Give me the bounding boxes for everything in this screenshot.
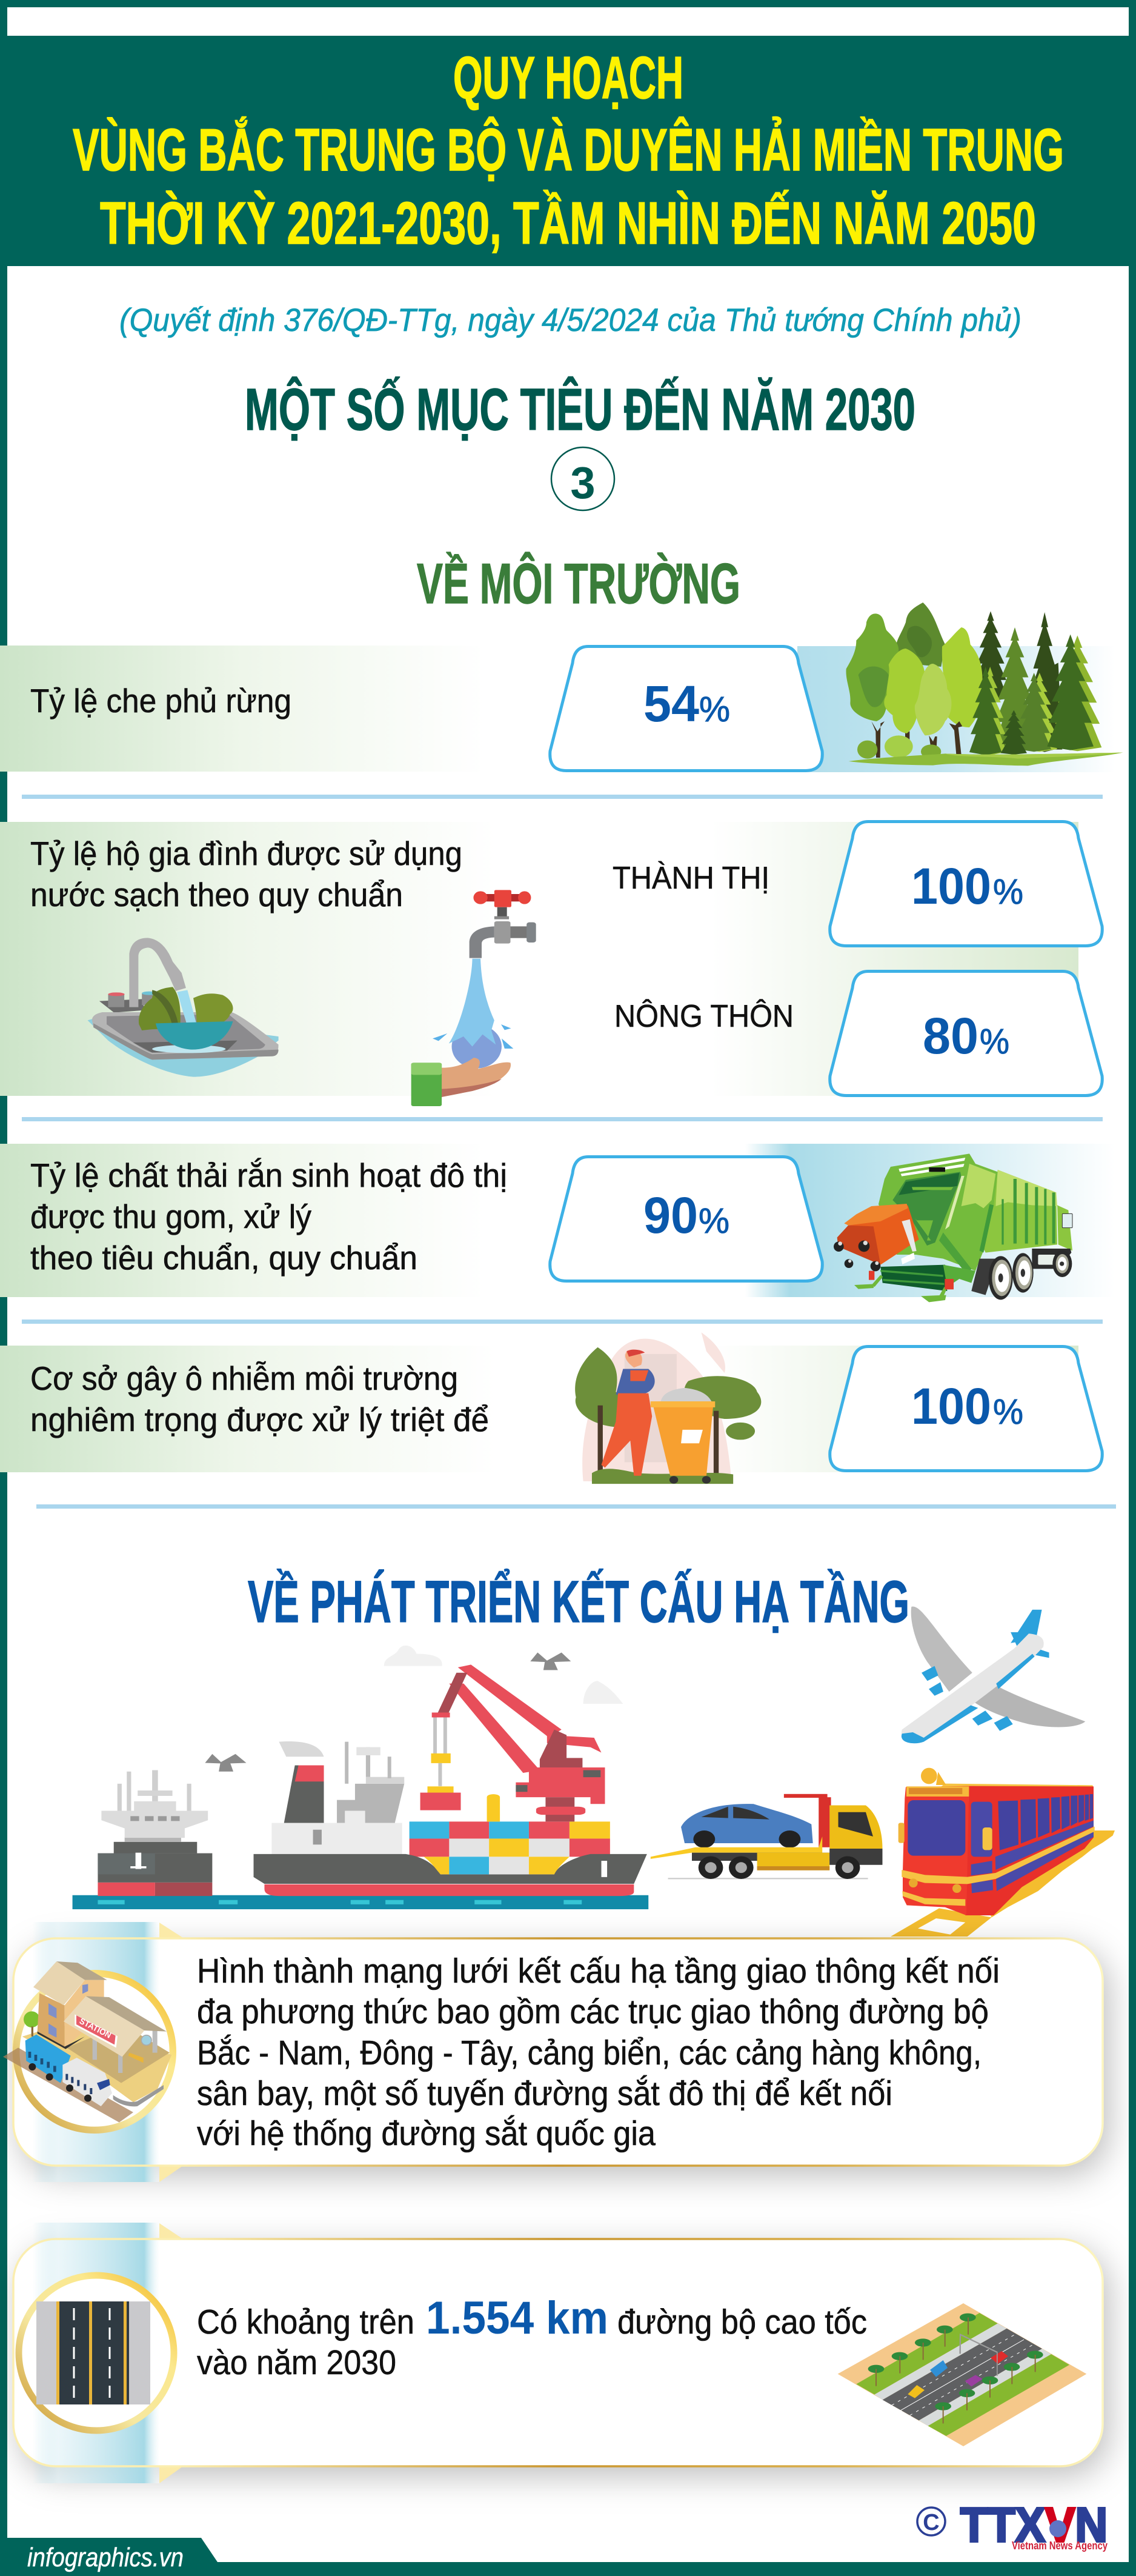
icon: railway station — [3, 1961, 173, 2130]
number badge — [551, 447, 614, 510]
card background — [13, 1938, 1103, 2166]
text: expressway length: vào năm 2030 — [197, 2343, 396, 2382]
logo: TTXVN: TTXVN — [960, 2498, 1108, 2552]
label: urban: THÀNH THỊ — [613, 861, 769, 896]
text: transport network: với hệ thống đường sắt quốc gia — [197, 2114, 656, 2153]
value box: 100%: % — [993, 1392, 1023, 1432]
footer bar — [0, 2538, 1136, 2576]
icon: water stream — [433, 959, 513, 1069]
value box: 80%: 80 — [923, 1007, 978, 1064]
label: rural: NÔNG THÔN — [614, 999, 794, 1034]
heading: environment: VỀ MÔI TRƯỜNG — [417, 552, 740, 615]
value box: 100% — [830, 822, 1102, 946]
illustration: tow truck with car — [651, 1794, 882, 1879]
text: transport network — [197, 1952, 1000, 2153]
value box: 54%: % — [699, 690, 730, 729]
label: pollution: Cơ sở gây ô nhiễm môi trường — [30, 1360, 458, 1397]
label: forest cover: Tỷ lệ che phủ rừng — [30, 682, 291, 719]
title: QUY HOẠCH — [453, 44, 683, 111]
panel: transport network — [3, 1922, 1103, 2182]
icon: hand — [411, 1058, 511, 1106]
card blue band — [33, 2223, 159, 2483]
panel: expressway — [13, 2223, 1103, 2483]
icon: sink with vegetables — [88, 938, 279, 1077]
label: clean water: nước sạch theo quy chuẩn — [30, 876, 403, 913]
icon: water tap — [470, 890, 536, 958]
label: solid waste: Tỷ lệ chất thải rắn sinh hoạt đô thị — [30, 1156, 507, 1194]
text: transport network: Bắc - Nam, Đông - Tây, cảng biển, các cảng hàng không, — [197, 2034, 982, 2072]
card blue band — [33, 1922, 159, 2182]
text: expressway length — [197, 2292, 867, 2382]
divider — [22, 1117, 1103, 1121]
title — [73, 44, 1064, 256]
value box: 54%: 54 — [643, 675, 699, 732]
footer bar: infographics.vn — [27, 2543, 184, 2572]
divider — [22, 1320, 1103, 1324]
icon: worker with recycling bin — [575, 1332, 761, 1484]
logo: TTXVN: C — [923, 2510, 940, 2535]
text: expressway length: Có khoảng trên — [197, 2303, 414, 2341]
value box: 80% — [830, 971, 1102, 1096]
value box: 100%: 100 — [911, 1378, 991, 1435]
icon: road — [19, 2275, 174, 2431]
illustration: airplane — [902, 1607, 1085, 1743]
icon: garbage truck — [834, 1153, 1072, 1302]
label: clean water: Tỷ lệ hộ gia đình được sử dụng — [30, 835, 462, 872]
value box: 90%: 90 — [643, 1187, 698, 1244]
text: transport network: sân bay, một số tuyến đường sắt đô thị để kết nối — [197, 2074, 892, 2113]
value box: 80%: % — [980, 1022, 1009, 1061]
icon: forest — [846, 602, 1123, 766]
value box: 100%: 100 — [911, 858, 991, 915]
divider — [36, 1504, 1116, 1509]
card background — [13, 2239, 1103, 2466]
panel: pollution — [0, 1332, 1102, 1484]
label: solid waste — [30, 1156, 507, 1276]
number badge: 3 — [570, 458, 596, 508]
illustration: port with ships and crane — [73, 1646, 648, 1909]
panel: solid waste — [0, 1144, 1115, 1302]
label: pollution: nghiêm trọng được xử lý triệt để — [30, 1401, 489, 1438]
subtitle: (Quyết định 376/QĐ-TTg, ngày 4/5/2024 của Thủ tướng Chính phủ) — [119, 302, 1021, 338]
text: transport network: đa phương thức bao gồm các trục giao thông đường bộ — [197, 1992, 989, 2031]
icon: isometric highway — [838, 2303, 1086, 2446]
value box: 54% — [550, 646, 822, 771]
logo: TTXVN: Vietnam News Agency — [1012, 2540, 1108, 2552]
label: clean water — [30, 835, 462, 913]
value box: 90%: % — [699, 1201, 729, 1241]
icon: railway station: STATION — [78, 2016, 113, 2040]
illustration: train — [891, 1768, 1115, 1937]
text: expressway length: 1.554 km — [426, 2292, 608, 2344]
text: transport network: Hình thành mạng lưới kết cấu hạ tầng giao thông kết nối — [197, 1952, 1000, 1990]
value box: 100%: % — [993, 872, 1023, 912]
label: pollution — [30, 1360, 489, 1438]
text: expressway length: đường bộ cao tốc — [617, 2303, 867, 2341]
label: solid waste: được thu gom, xử lý — [30, 1198, 311, 1235]
value box: 90% — [550, 1156, 822, 1281]
panel: clean water — [0, 822, 1102, 1106]
panel: forest cover — [0, 602, 1123, 772]
label: solid waste: theo tiêu chuẩn, quy chuẩn — [30, 1239, 417, 1276]
value box: 100% — [830, 1347, 1102, 1470]
divider — [22, 795, 1103, 799]
